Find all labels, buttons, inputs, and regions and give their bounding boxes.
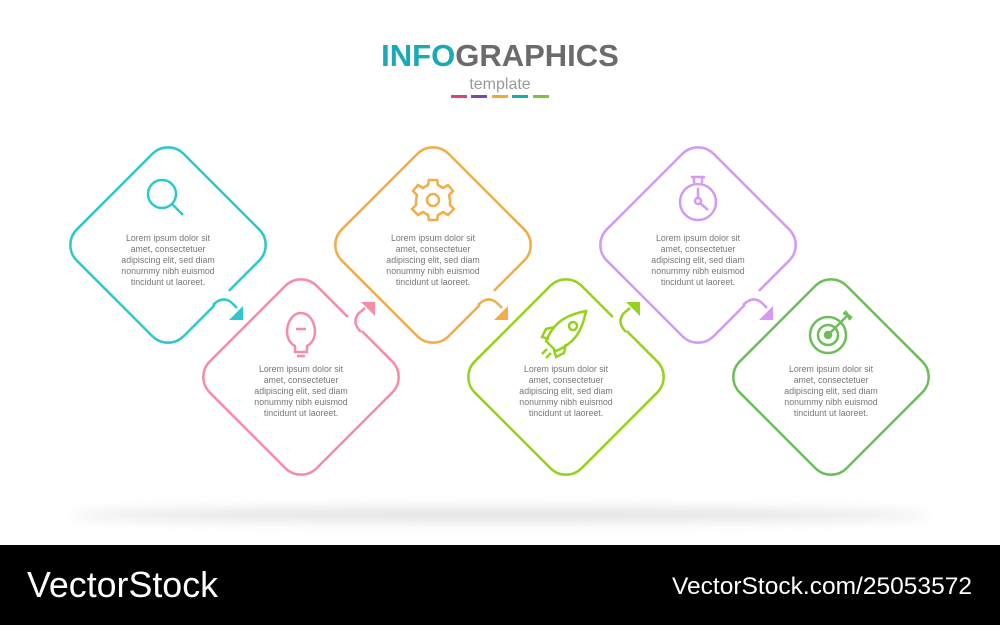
text bbox=[784, 364, 878, 418]
text: tincidunt ut laoreet. bbox=[529, 408, 603, 418]
panel: step 6 bbox=[724, 270, 938, 484]
text bbox=[121, 233, 215, 287]
text: Lorem ipsum dolor sit bbox=[524, 364, 609, 374]
title: template bbox=[469, 76, 531, 93]
text: Lorem ipsum dolor sit bbox=[391, 233, 476, 243]
text: nonummy nibh euismod bbox=[254, 397, 348, 407]
text: amet, consectetuer bbox=[529, 375, 603, 385]
text: amet, consectetuer bbox=[131, 244, 205, 254]
icon: rocket bbox=[542, 311, 586, 358]
title bbox=[381, 38, 619, 93]
panel: step 3 bbox=[326, 138, 540, 352]
text: nonummy nibh euismod bbox=[519, 397, 613, 407]
text bbox=[386, 233, 480, 287]
footer bar: VectorStock bbox=[27, 564, 219, 605]
text: tincidunt ut laoreet. bbox=[264, 408, 338, 418]
text: Lorem ipsum dolor sit bbox=[259, 364, 344, 374]
text: adipiscing elit, sed diam bbox=[519, 386, 613, 396]
text bbox=[651, 233, 745, 287]
text: nonummy nibh euismod bbox=[121, 266, 215, 276]
icon: gear bbox=[412, 180, 454, 220]
panel: step 2 bbox=[194, 270, 408, 484]
text: nonummy nibh euismod bbox=[386, 266, 480, 276]
text: Lorem ipsum dolor sit bbox=[656, 233, 741, 243]
text: amet, consectetuer bbox=[396, 244, 470, 254]
panel: step 1 bbox=[61, 138, 275, 352]
icon: light bulb bbox=[287, 313, 315, 356]
text bbox=[519, 364, 613, 418]
text: adipiscing elit, sed diam bbox=[386, 255, 480, 265]
title: INFOGRAPHICS bbox=[381, 38, 619, 73]
icon: target bbox=[810, 311, 852, 353]
text: adipiscing elit, sed diam bbox=[651, 255, 745, 265]
panel: step 4 bbox=[459, 270, 673, 484]
text bbox=[254, 364, 348, 418]
shadow bbox=[70, 508, 930, 522]
text: tincidunt ut laoreet. bbox=[396, 277, 470, 287]
color bars bbox=[451, 95, 549, 98]
icon: stopwatch bbox=[680, 177, 716, 220]
text: Lorem ipsum dolor sit bbox=[789, 364, 874, 374]
text: Lorem ipsum dolor sit bbox=[126, 233, 211, 243]
footer bar: VectorStock.com/25053572 bbox=[672, 573, 972, 600]
text: nonummy nibh euismod bbox=[784, 397, 878, 407]
text: tincidunt ut laoreet. bbox=[131, 277, 205, 287]
text: nonummy nibh euismod bbox=[651, 266, 745, 276]
text: amet, consectetuer bbox=[264, 375, 338, 385]
text: amet, consectetuer bbox=[794, 375, 868, 385]
text: adipiscing elit, sed diam bbox=[121, 255, 215, 265]
text: tincidunt ut laoreet. bbox=[794, 408, 868, 418]
panel: step 5 bbox=[591, 138, 805, 352]
text: amet, consectetuer bbox=[661, 244, 735, 254]
text: adipiscing elit, sed diam bbox=[254, 386, 348, 396]
text: adipiscing elit, sed diam bbox=[784, 386, 878, 396]
icon: magnifier bbox=[148, 180, 183, 215]
text: tincidunt ut laoreet. bbox=[661, 277, 735, 287]
footer bar bbox=[0, 545, 1000, 625]
